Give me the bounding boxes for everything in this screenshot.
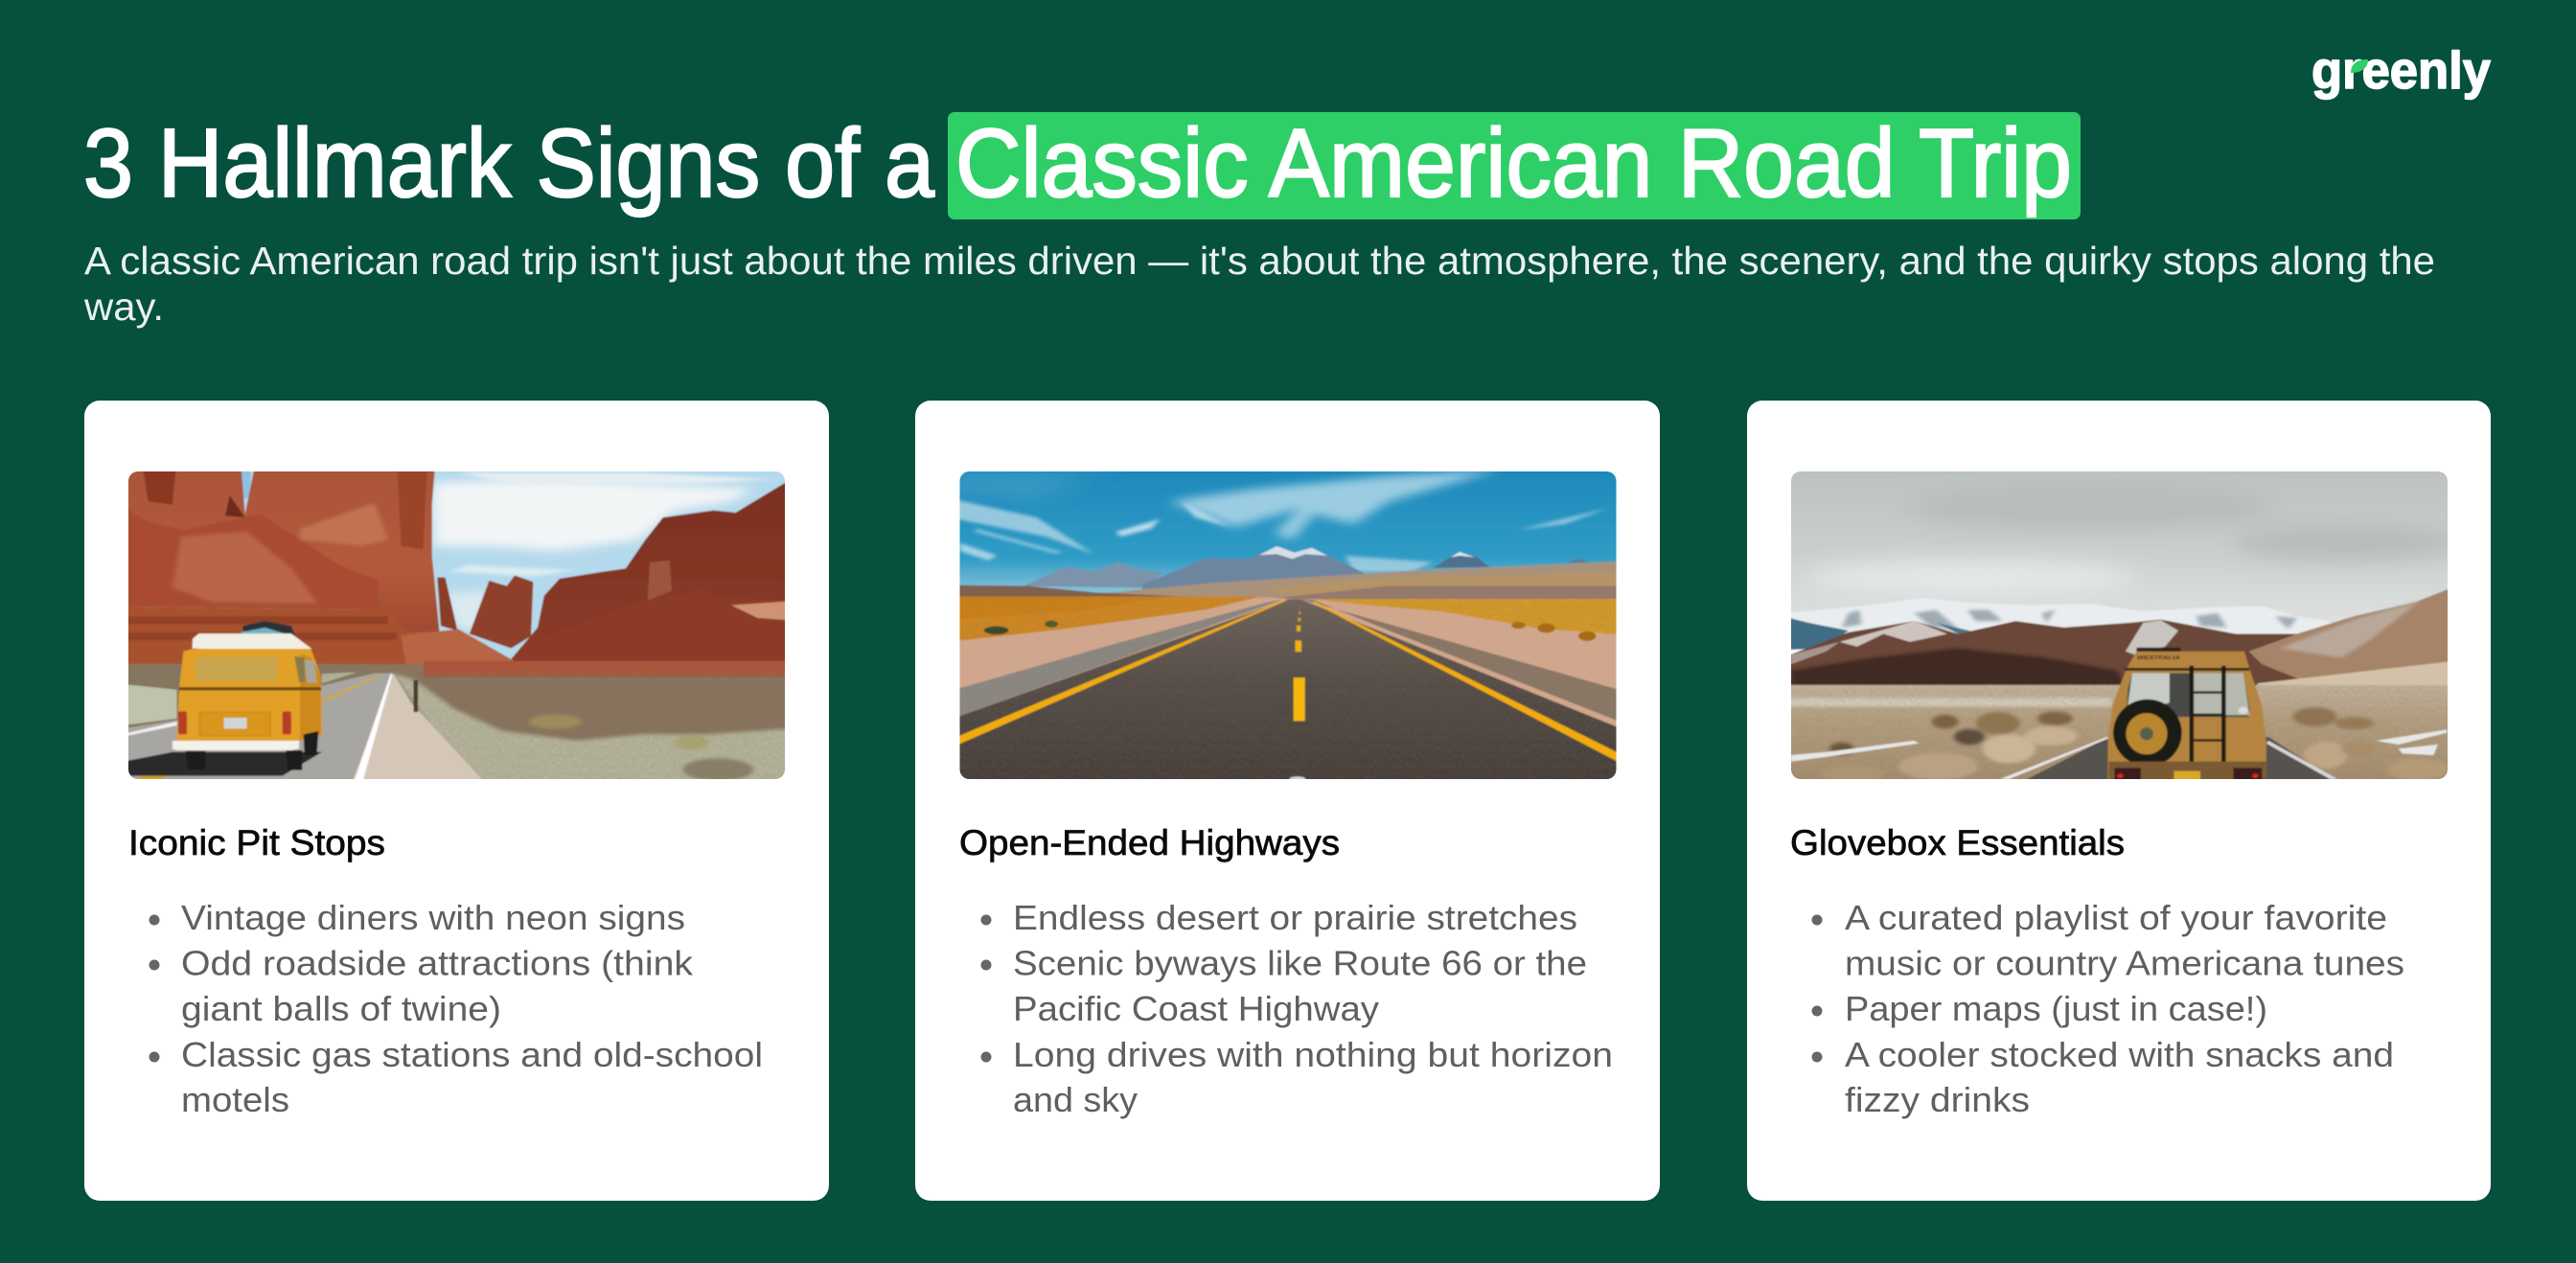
bullet list <box>150 898 763 1119</box>
icon: green leaf on the r <box>2351 59 2368 73</box>
bullet list: A cooler stocked with snacks and <box>1845 1035 2394 1074</box>
subtitle <box>83 239 2435 329</box>
photo: open desert highway with mountains <box>960 471 1616 779</box>
subtitle: A classic American road trip isn't just about the miles driven — it's about the atmosphere, the scenery, and the quirky stops along the <box>84 239 2435 283</box>
bullet list: motels <box>181 1080 289 1119</box>
bullet list: Odd roadside attractions (think <box>181 943 694 983</box>
panel: Open-Ended Highways <box>915 401 1660 1201</box>
heading: Glovebox Essentials <box>1790 823 2125 862</box>
bullet list: giant balls of twine) <box>181 989 501 1028</box>
bullet list: Endless desert or prairie stretches <box>1013 898 1577 937</box>
bullet list: music or country Americana tunes <box>1845 943 2404 983</box>
subtitle: way. <box>83 285 164 329</box>
bullet list: Scenic byways like Route 66 or the <box>1013 943 1587 983</box>
heading: Iconic Pit Stops <box>128 823 385 862</box>
title <box>83 110 2081 219</box>
bullet list: Paper maps (just in case!) <box>1845 989 2267 1028</box>
logo: greenly: greenly <box>2312 40 2491 100</box>
bullet list: Long drives with nothing but horizon <box>1013 1035 1613 1074</box>
bullet list: A curated playlist of your favorite <box>1845 898 2387 937</box>
bullet list: and sky <box>1013 1080 1138 1119</box>
bullet list <box>1811 898 2404 1119</box>
bullet list: Classic gas stations and old-school <box>181 1035 763 1074</box>
photo: tan camper van facing snowy mountains: WESTFALIA <box>2137 655 2180 660</box>
bullet list: Vintage diners with neon signs <box>181 898 685 937</box>
bullet list: Pacific Coast Highway <box>1013 989 1379 1028</box>
title: 3 Hallmark Signs of a <box>83 110 935 218</box>
bullet list: fizzy drinks <box>1845 1080 2030 1119</box>
photo: yellow van in red rock canyon <box>128 471 785 779</box>
panel: Iconic Pit Stops <box>84 401 829 1201</box>
photo: tan camper van facing snowy mountains <box>1791 471 2448 779</box>
heading: Open-Ended Highways <box>959 823 1340 862</box>
panel: Glovebox Essentials <box>1747 401 2491 1201</box>
title highlight: Classic American Road Trip <box>955 110 2072 218</box>
bullet list <box>981 898 1613 1119</box>
